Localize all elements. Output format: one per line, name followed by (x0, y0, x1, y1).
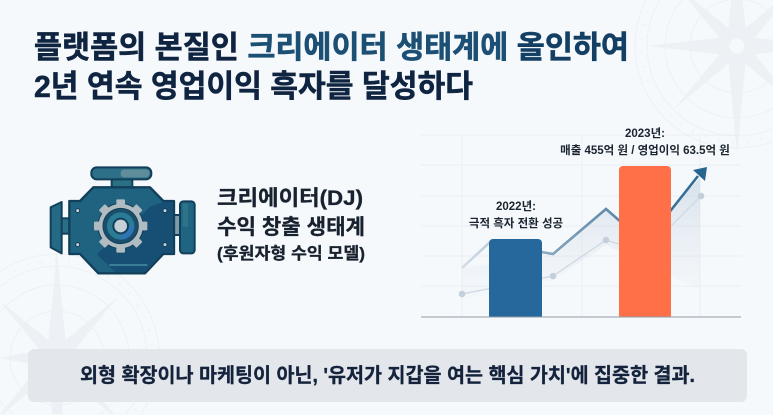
label: 2022: 2022년: (496, 199, 536, 213)
compass watermark: top right (634, 0, 773, 149)
text block: creator ecosystem: 수익 창출 생태계 (217, 216, 365, 239)
callout banner (28, 349, 747, 402)
label: 2023: 2023년: (625, 126, 665, 140)
label: 2022 (469, 199, 564, 230)
icon: engine with gear (51, 167, 195, 273)
trend arrow (462, 167, 707, 268)
compass watermark: bottom left (0, 250, 159, 414)
engine body (69, 187, 174, 273)
thin data line (459, 193, 704, 297)
callout banner: 외형 확장이나 마케팅이 아닌, '유저가 지갑을 여는 핵심 가치'에 집중한 결과. (80, 364, 695, 387)
engine left flange (51, 202, 71, 253)
text block: creator ecosystem: 크리에이터(DJ) (217, 187, 363, 210)
bar: 2023 (619, 166, 671, 317)
title: 플랫폼의 본질인 크리에이터 생태계에 올인하여 (34, 30, 629, 65)
gear (94, 199, 147, 253)
label: 2022: 극적 흑자 전환 성공 (469, 216, 564, 230)
engine top cap (91, 167, 151, 189)
title: 2년 연속 영업이익 흑자를 달성하다 (34, 69, 473, 104)
engine right flange (173, 201, 195, 253)
chart: profit bars and trend (421, 126, 741, 317)
label: 2023: 매출 455억 원 / 영업이익 63.5억 원 (560, 143, 730, 157)
text block: creator ecosystem: (후원자형 수익 모델) (217, 244, 365, 263)
label: 2023 (560, 126, 730, 157)
text block: creator ecosystem (217, 187, 365, 263)
title (34, 30, 629, 104)
bar: 2022 (489, 239, 542, 317)
area under trend (462, 178, 700, 300)
